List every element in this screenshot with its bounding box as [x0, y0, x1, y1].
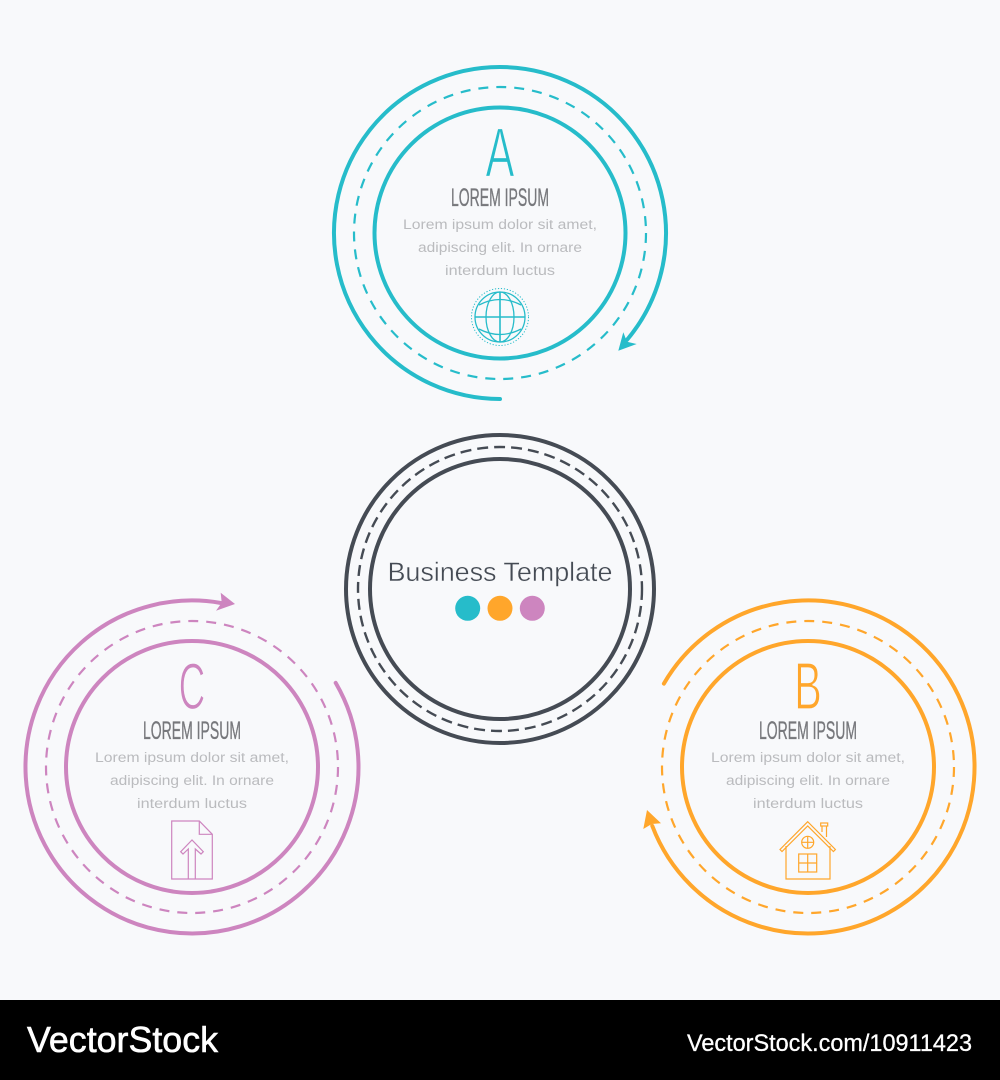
ring B: inner [682, 641, 934, 893]
icon: globe [472, 288, 528, 346]
letter B: B [794, 649, 822, 723]
ring C: dashed [46, 621, 338, 913]
ring A: inner [374, 108, 626, 358]
panel C [25, 593, 358, 933]
body text C: adipiscing elit. In ornare [110, 773, 274, 788]
panel: centre [346, 435, 654, 743]
centre ring inner [370, 459, 630, 719]
ring B: outer arrow arc [652, 600, 975, 933]
centre ring outer [346, 435, 654, 743]
letter A: A [486, 114, 515, 192]
arrowhead A [618, 332, 637, 351]
body text A: Lorem ipsum dolor sit amet, [403, 217, 597, 232]
body text B: interdum luctus [753, 796, 863, 811]
body text B [711, 750, 905, 811]
body text C: Lorem ipsum dolor sit amet, [95, 750, 289, 765]
centre ring dashed [358, 447, 642, 731]
dots [455, 596, 545, 621]
watermark url: VectorStock.com/10911423 [687, 1030, 972, 1057]
arrowhead C [216, 593, 235, 611]
ring C: inner [66, 641, 318, 893]
watermark logo: VectorStock [27, 1019, 219, 1060]
body text A: adipiscing elit. In ornare [418, 240, 582, 255]
body text A: interdum luctus [445, 263, 555, 278]
footer bar [0, 1000, 1000, 1080]
body text B: adipiscing elit. In ornare [726, 773, 890, 788]
body text C [95, 750, 289, 811]
body text B: Lorem ipsum dolor sit amet, [711, 750, 905, 765]
icon: house [780, 822, 835, 879]
ring B: dashed [662, 621, 954, 913]
panel B [643, 600, 975, 933]
heading B: LOREM IPSUM [759, 717, 857, 745]
ring C: outer arrow arc [25, 600, 358, 933]
heading C: LOREM IPSUM [143, 717, 241, 745]
icon: file upload [172, 821, 212, 879]
ring A: dashed [354, 87, 646, 379]
arrowhead B [643, 810, 661, 829]
body text A [403, 217, 597, 278]
letter C: C [179, 651, 205, 724]
heading A: LOREM IPSUM [451, 184, 549, 212]
panel A [334, 67, 666, 399]
title: Business Template [388, 557, 612, 587]
ring A: outer arrow arc [334, 67, 666, 399]
body text C: interdum luctus [137, 796, 247, 811]
